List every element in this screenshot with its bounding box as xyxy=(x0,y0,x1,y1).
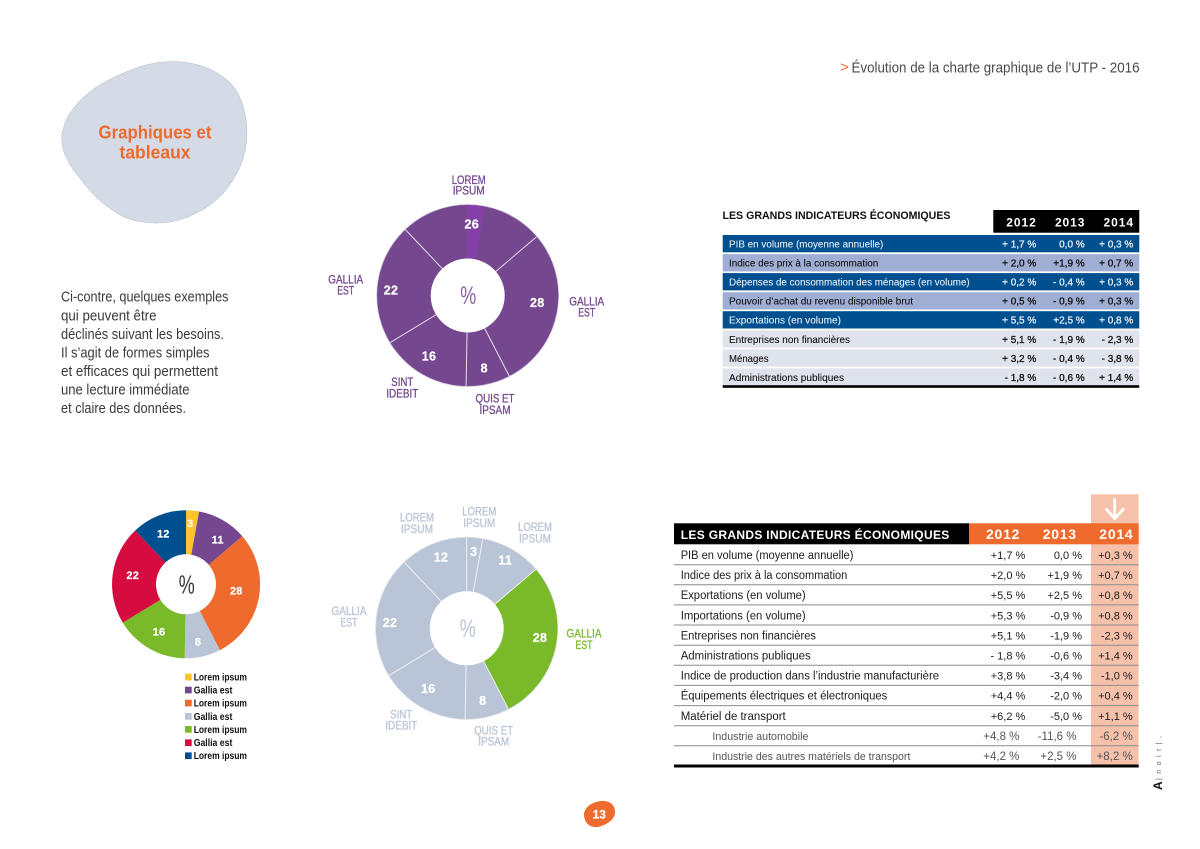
donut chart: purple: % xyxy=(460,282,476,310)
row: matériel de transport: -5,0 % xyxy=(1050,711,1082,723)
row: importations: -0,9 % xyxy=(1050,610,1082,622)
row: indice de production xyxy=(681,671,1133,683)
row: importations: +5,3 % xyxy=(991,610,1026,622)
table 2 header: 2014 xyxy=(1099,526,1133,542)
donut chart: grey with green highlight: 11 xyxy=(498,554,512,568)
row: entreprises: Entreprises non financières xyxy=(729,334,850,346)
row: entreprises: - 1,9 % xyxy=(1053,335,1085,346)
row: indice des prix xyxy=(723,254,1139,271)
donut chart: grey with green highlight: 3 xyxy=(470,545,477,559)
donut chart: purple: 8 xyxy=(481,362,488,376)
row: administrations: - 1,8 % xyxy=(990,650,1026,662)
table 1 year header: 2014 xyxy=(1104,215,1133,229)
chart legend xyxy=(185,672,247,762)
row: exportations xyxy=(723,311,1139,328)
row: exportations: + 5,5 % xyxy=(1002,316,1036,327)
row: équipements: -2,0 % xyxy=(1050,691,1082,703)
row: PIB xyxy=(681,550,1133,562)
intro paragraph: Ci-contre, quelques exemples xyxy=(61,290,228,306)
row: exportations: +2,5 % xyxy=(1053,316,1085,327)
row: exportations: Exportations (en volume) xyxy=(681,590,806,602)
row: ménages xyxy=(723,349,1139,367)
row: administrations: - 0,6 % xyxy=(1053,373,1085,384)
table 1 year header xyxy=(993,210,1139,233)
row: entreprises xyxy=(723,330,1139,348)
row: pouvoir d'achat xyxy=(723,292,1139,310)
row: entreprises: -2,3 % xyxy=(1101,630,1133,642)
chart legend: Lorem ipsum xyxy=(194,725,247,736)
donut chart: multicolour: 28 xyxy=(230,586,243,598)
intro paragraph: Il s’agit de formes simples xyxy=(61,346,210,362)
intro paragraph xyxy=(61,290,228,417)
row: administrations: -0,6 % xyxy=(1050,650,1082,662)
intro paragraph: une lecture immédiate xyxy=(61,383,190,399)
donut chart: grey with green highlight: SINT xyxy=(390,707,413,721)
table 2 header xyxy=(674,523,1139,544)
donut chart: grey with green highlight: 12 xyxy=(434,550,448,564)
donut chart: grey with green highlight: IPSAM xyxy=(478,735,509,749)
donut chart: grey with green highlight: 28 xyxy=(533,631,547,645)
chart legend: Lorem ipsum xyxy=(194,672,247,684)
row: pouvoir d'achat: - 0,9 % xyxy=(1053,297,1085,308)
donut chart: grey with green highlight: IPSUM xyxy=(401,522,433,536)
donut chart: grey with green highlight: IDEBIT xyxy=(385,718,418,732)
row: PIB: + 0,3 % xyxy=(1099,240,1133,250)
row: exportations: +5,5 % xyxy=(991,590,1026,602)
row: entreprises: -1,9 % xyxy=(1050,630,1082,642)
donut chart: multicolour: 12 xyxy=(157,528,170,540)
icon: down arrow xyxy=(1106,498,1124,518)
donut chart: grey with green highlight: GALLIA xyxy=(566,627,602,641)
table 1 year header: 2012 xyxy=(1006,215,1036,229)
row: administrations: +1,4 % xyxy=(1098,650,1133,662)
row: entreprises: - 2,3 % xyxy=(1102,335,1133,346)
row: pouvoir d'achat: Pouvoir d’achat du revenu disponible brut xyxy=(729,296,913,308)
row: indice des prix: Indice des prix à la consommation xyxy=(681,570,847,582)
row: dépenses: + 0,3 % xyxy=(1099,278,1133,289)
row: industrie automobile: -11,6 % xyxy=(1038,731,1076,743)
donut chart: purple: QUIS ET xyxy=(476,392,515,406)
row: dépenses: + 0,2 % xyxy=(1002,278,1036,289)
donut chart: grey with green highlight: LOREM xyxy=(462,505,496,519)
donut chart: purple: IPSUM xyxy=(453,184,485,198)
row: exportations: +2,5 % xyxy=(1047,590,1082,602)
row: entreprises xyxy=(681,630,1133,642)
side brand mark xyxy=(1151,736,1165,790)
row: administrations: Administrations publiques xyxy=(729,372,844,384)
intro paragraph: déclinés suivant les besoins. xyxy=(61,327,224,343)
donut chart: grey with green highlight: 22 xyxy=(383,616,397,630)
row: dépenses: - 0,4 % xyxy=(1053,278,1085,289)
donut chart: purple: 26 xyxy=(464,218,479,232)
side brand mark: A xyxy=(1151,781,1165,790)
row: administrations: + 1,4 % xyxy=(1099,373,1133,384)
row: ménages: + 3,2 % xyxy=(1002,354,1036,365)
row: importations: +0,8 % xyxy=(1098,610,1133,622)
row: PIB: 0,0 % xyxy=(1059,240,1085,250)
donut chart: purple: IPSAM xyxy=(480,403,511,417)
row: administrations: - 1,8 % xyxy=(1005,373,1036,384)
title blob: tableaux xyxy=(120,143,190,163)
row: équipements: +0,4 % xyxy=(1098,691,1133,703)
donut chart: purple: IDEBIT xyxy=(386,386,419,400)
row separators xyxy=(674,565,1139,766)
row: équipements xyxy=(681,690,1133,703)
row: indice de production: +3,8 % xyxy=(991,671,1026,683)
donut chart: multicolour: 3 xyxy=(187,518,193,530)
row: PIB: 0,0 % xyxy=(1054,550,1082,562)
row: dépenses xyxy=(723,273,1139,290)
row: autres matériels de transport: +8,2 % xyxy=(1097,751,1133,763)
donut chart: purple: 28 xyxy=(530,296,545,310)
row: indice des prix: +0,7 % xyxy=(1098,570,1133,582)
title blob xyxy=(62,62,247,223)
donut chart: grey with green highlight: EST xyxy=(340,615,358,629)
donut chart: grey with green highlight: IPSUM xyxy=(519,531,551,545)
donut chart: grey with green highlight: % xyxy=(460,615,476,643)
row: industrie automobile: -6,2 % xyxy=(1099,731,1133,743)
donut chart: purple: LOREM xyxy=(452,173,486,187)
row: administrations xyxy=(681,650,1133,662)
table 1 year header: 2013 xyxy=(1055,215,1085,229)
row: ménages: Ménages xyxy=(729,353,768,365)
chart legend: Gallia est xyxy=(194,738,233,749)
page header: Évolution de la charte graphique de l’UTP - 2016 xyxy=(852,60,1140,76)
chart legend: Lorem ipsum xyxy=(194,751,247,762)
row: entreprises: + 5,1 % xyxy=(1002,335,1036,346)
row: PIB: + 1,7 % xyxy=(1002,240,1036,250)
donut chart: purple: EST xyxy=(578,306,596,320)
row: pouvoir d'achat: + 0,3 % xyxy=(1099,297,1133,308)
title blob: Graphiques et xyxy=(98,123,212,143)
donut chart: multicolour: 8 xyxy=(195,637,201,649)
donut chart: purple: GALLIA xyxy=(569,295,604,309)
donut chart: multicolour xyxy=(112,510,260,658)
row: industrie automobile xyxy=(712,731,1133,743)
row: autres matériels de transport xyxy=(712,751,1133,763)
side brand mark: |noir|, xyxy=(1156,736,1163,780)
intro paragraph: qui peuvent être xyxy=(61,308,156,324)
table 1: économique indicators xyxy=(722,209,1139,388)
row: exportations: Exportations (en volume) xyxy=(729,315,841,327)
donut chart: grey with green highlight: IPSUM xyxy=(463,516,495,530)
donut chart: grey with green highlight: EST xyxy=(576,638,593,652)
donut chart: multicolour: 16 xyxy=(153,627,165,639)
row: entreprises: Entreprises non financières xyxy=(681,630,816,642)
row: ménages: - 0,4 % xyxy=(1053,354,1085,365)
donut chart: grey with green highlight: LOREM xyxy=(518,520,552,534)
row: autres matériels de transport: +4,2 % xyxy=(983,751,1019,763)
row: indice de production: -1,0 % xyxy=(1101,671,1133,683)
row: PIB: +0,3 % xyxy=(1098,550,1133,562)
row: PIB xyxy=(723,235,1139,252)
row: exportations: + 0,8 % xyxy=(1099,316,1133,327)
donut chart: purple: GALLIA xyxy=(328,272,363,286)
row: indice de production: -3,4 % xyxy=(1050,671,1082,683)
row: équipements: +4,4 % xyxy=(991,691,1026,703)
row: administrations xyxy=(723,368,1139,388)
row: industrie automobile: Industrie automobile xyxy=(712,731,808,743)
row: indice des prix: + 0,7 % xyxy=(1099,259,1133,270)
row: indice de production: Indice de production dans l’industrie manufacturière xyxy=(681,671,939,683)
row: indice des prix: Indice des prix à la consommation xyxy=(729,258,878,270)
intro paragraph: et efficaces qui permettent xyxy=(61,364,218,380)
row: matériel de transport: +6,2 % xyxy=(991,711,1026,723)
donut chart: grey with green highlight xyxy=(332,505,602,749)
row: autres matériels de transport: +2,5 % xyxy=(1040,751,1076,763)
donut chart: purple: 22 xyxy=(384,284,398,298)
table 2 header: 2012 xyxy=(986,526,1020,542)
chart legend: Lorem ipsum xyxy=(194,698,247,710)
row: importations xyxy=(681,610,1133,622)
row: indice des prix: +2,0 % xyxy=(991,570,1026,582)
donut chart: purple xyxy=(328,173,604,417)
donut chart: grey with green highlight: 16 xyxy=(421,682,436,696)
page header: > xyxy=(840,59,849,76)
donut chart: grey with green highlight: LOREM xyxy=(400,511,434,525)
row: entreprises: +5,1 % xyxy=(991,630,1026,642)
table 2 header: 2013 xyxy=(1043,526,1076,542)
donut chart: multicolour: % xyxy=(179,570,195,600)
intro paragraph: et claire des données. xyxy=(61,401,186,417)
table 1 title: LES GRANDS INDICATEURS ÉCONOMIQUES xyxy=(722,209,950,222)
donut chart: grey with green highlight: 8 xyxy=(479,694,486,708)
table 2: économique indicators with 2014 highlight xyxy=(674,494,1139,766)
donut chart: grey with green highlight: QUIS ET xyxy=(474,723,514,737)
donut chart: multicolour: 22 xyxy=(126,570,139,582)
chart legend: Gallia est xyxy=(194,712,233,723)
donut chart: purple: SINT xyxy=(391,375,414,389)
page number xyxy=(584,801,615,827)
row: indice des prix xyxy=(681,570,1133,582)
table 2 header: LES GRANDS INDICATEURS ÉCONOMIQUES xyxy=(681,527,949,542)
row: autres matériels de transport: Industrie des autres matériels de transport xyxy=(712,751,910,763)
row: PIB: PIB en volume (moyenne annuelle) xyxy=(681,550,854,562)
donut chart: purple: EST xyxy=(337,283,355,297)
row: administrations: Administrations publiques xyxy=(681,650,811,662)
donut chart: purple: 16 xyxy=(422,350,436,364)
row: matériel de transport: Matériel de transport xyxy=(681,711,786,723)
row: ménages: - 3,8 % xyxy=(1102,354,1133,365)
row: dépenses: Dépenses de consommation des ménages (en volume) xyxy=(729,277,970,289)
row: matériel de transport: +1,1 % xyxy=(1098,711,1133,723)
row: exportations: +0,8 % xyxy=(1098,590,1133,602)
row: indice des prix: +1,9 % xyxy=(1053,259,1085,270)
row: industrie automobile: +4,8 % xyxy=(983,731,1019,743)
donut chart: grey with green highlight: GALLIA xyxy=(332,604,366,618)
row: pouvoir d'achat: + 0,5 % xyxy=(1002,297,1036,308)
row: PIB: +1,7 % xyxy=(991,550,1026,562)
chart legend: Gallia est xyxy=(194,686,233,696)
row: indice des prix: + 2,0 % xyxy=(1002,259,1036,270)
donut chart: multicolour: 11 xyxy=(212,534,224,546)
page number: 13 xyxy=(593,807,606,821)
row: indice des prix: +1,9 % xyxy=(1047,570,1082,582)
row: importations: Importations (en volume) xyxy=(681,610,806,622)
row: exportations xyxy=(681,590,1133,602)
highlighted 2014 column xyxy=(1091,494,1139,766)
row: matériel de transport xyxy=(681,711,1133,723)
row: équipements: Équipements électriques et électroniques xyxy=(681,690,888,703)
row: PIB: PIB en volume (moyenne annuelle) xyxy=(729,238,883,250)
